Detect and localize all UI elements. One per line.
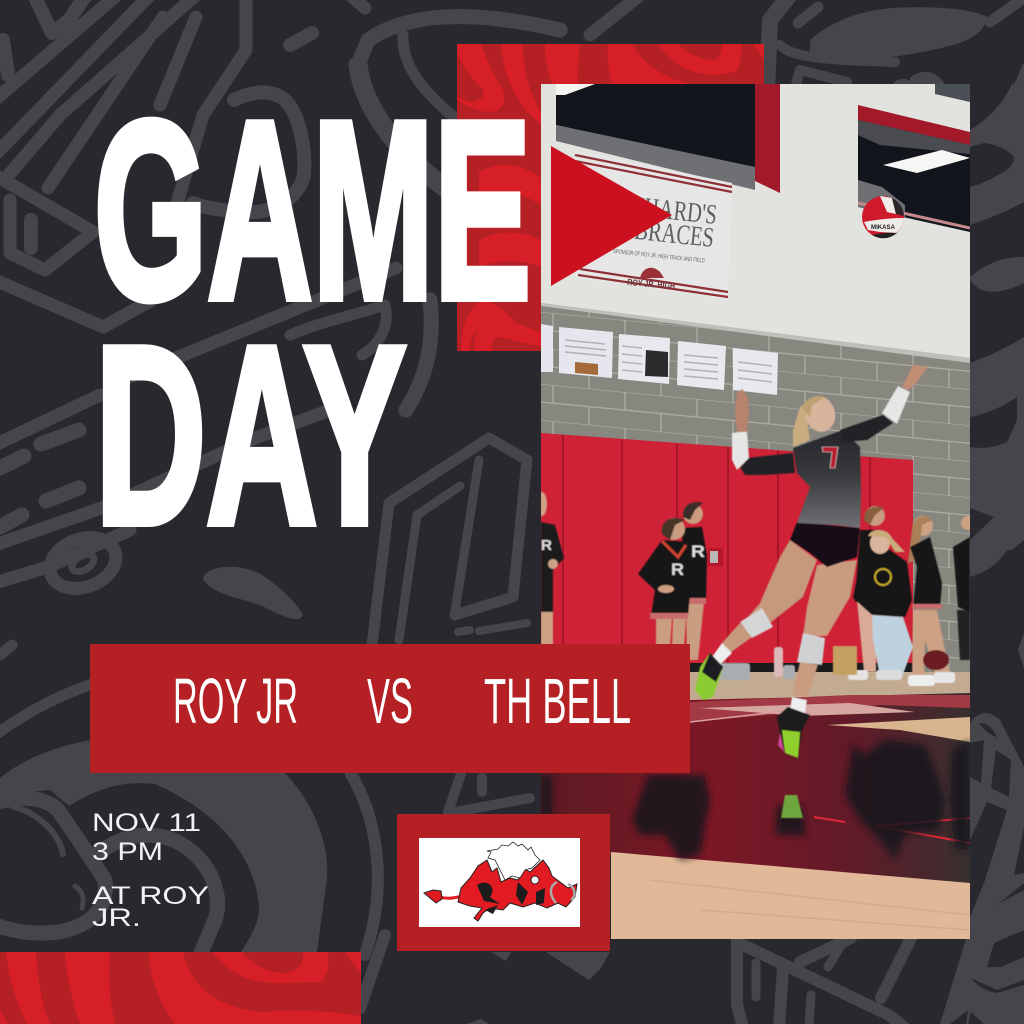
date and location text (92, 809, 209, 932)
time: 3 PM (92, 838, 163, 866)
banner: SPONSOR OF ROY JR. HIGH TRACK AND FIELD (613, 249, 705, 265)
location line 2: JR. (92, 904, 141, 932)
title: GAME DAY (94, 68, 531, 577)
cheerleader front (638, 518, 692, 648)
floor reflections (541, 740, 970, 860)
equipment on floor (720, 646, 949, 680)
tail (440, 893, 470, 898)
banner (575, 150, 732, 300)
eye (531, 876, 539, 884)
logo panel (397, 814, 610, 951)
cheerleader right (908, 516, 955, 686)
team: Roy Jr: ROY JR (173, 665, 298, 737)
right window (858, 84, 970, 232)
black markings (477, 882, 545, 914)
GAME: GAME (94, 68, 531, 352)
cheerleader far right (952, 516, 970, 661)
banner: RICHARD'S (609, 189, 719, 231)
shoe reflection (781, 795, 803, 818)
cheerleader behind (682, 502, 707, 660)
cheerleader far left (541, 492, 565, 644)
head and hair (793, 393, 839, 447)
banner: BRACES (633, 215, 716, 254)
shorts (790, 522, 860, 567)
hoodie girl (848, 530, 913, 680)
raised right arm (840, 365, 928, 442)
mid-court cheerleaders (537, 492, 975, 686)
left window (556, 84, 780, 193)
location: AT ROY (92, 882, 209, 910)
vs: VS (367, 665, 413, 737)
team: TH Bell: TH BELL (484, 665, 631, 737)
jersey number 7 (822, 447, 838, 468)
cheerleader front: R (671, 560, 684, 579)
date: NOV 11 (92, 809, 201, 837)
banner: ROY JR. HIGH (627, 277, 676, 291)
cheerleader behind: R (691, 542, 705, 561)
cheerleader back right (855, 506, 885, 672)
gym wall (541, 84, 970, 364)
left knob ring (0, 798, 105, 933)
volleyball player (695, 365, 928, 758)
cheerleader far left: R (541, 537, 552, 554)
DAY: DAY (95, 293, 406, 577)
panel: red swirl bottom left (0, 952, 361, 1024)
red wall pads (541, 433, 913, 672)
icon: red boar mascot (424, 842, 577, 921)
play triangle (551, 146, 672, 286)
body (458, 860, 577, 921)
matchup banner (90, 644, 690, 773)
jersey (793, 430, 861, 528)
back leg (695, 540, 817, 700)
volleyball: MIKASA (871, 225, 896, 231)
photo: volleyball player serving in gym (537, 84, 975, 939)
front leg (777, 560, 857, 758)
panel: red swirl behind title (457, 44, 764, 351)
raised left arm (732, 389, 795, 475)
mane (487, 842, 540, 880)
inner ring of large circle (100, 835, 218, 955)
right side doodle (940, 80, 1024, 1024)
posters (541, 324, 778, 395)
gym floor (541, 672, 970, 939)
cinder block wall (541, 297, 970, 690)
volleyball (862, 196, 904, 238)
tusks (551, 882, 574, 903)
